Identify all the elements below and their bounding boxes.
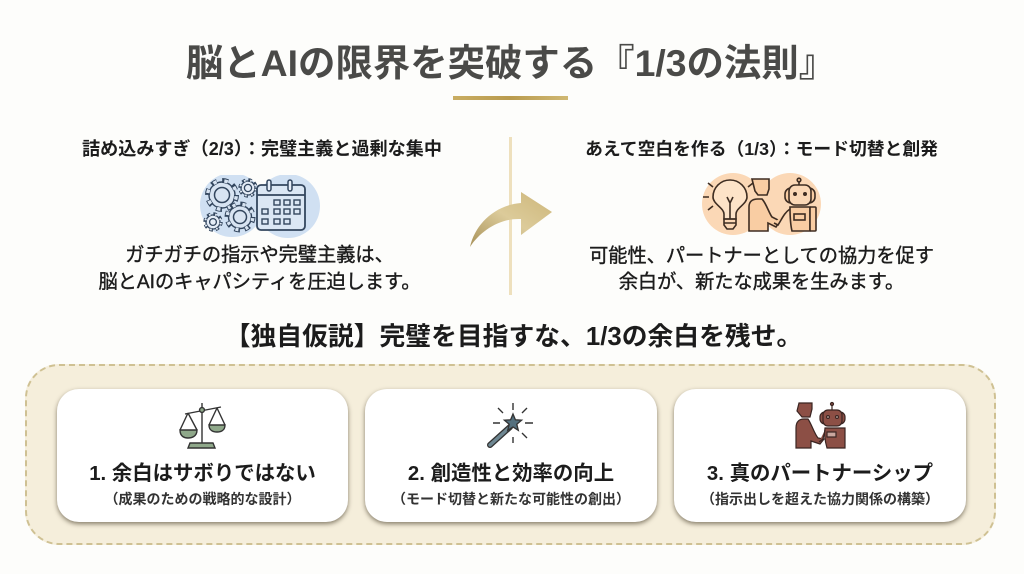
card 2 subtitle: （モード切替と新たな可能性の創出） [392, 491, 630, 507]
card 3 [674, 389, 966, 522]
left body text: ガチガチの指示や完璧主義は、 [125, 245, 394, 266]
title underline [453, 96, 568, 100]
panel: left, over-packed [82, 139, 442, 293]
card 3 subtitle: （指示出しを超えた協力関係の構築） [701, 491, 939, 507]
card 1 subtitle: （成果のための戦略的な設計） [104, 491, 300, 507]
right body text: 可能性、パートナーとしての協力を促す [589, 246, 934, 267]
divider line [509, 137, 512, 295]
panel: takeaways container [25, 364, 996, 545]
arrow [470, 192, 552, 247]
large gear [208, 180, 236, 210]
lower large gear [227, 204, 253, 230]
right body text: 余白が、新たな成果を生みます。 [619, 272, 904, 292]
card 3 title: 3. 真のパートナーシップ [707, 463, 933, 485]
left body text: 脳とAIのキャパシティを圧迫します。 [98, 272, 421, 293]
lower small gear [205, 214, 221, 230]
icon: magic wand [487, 403, 533, 448]
left heading: 詰め込みすぎ（2/3）：完璧主義と過剰な集中 [82, 139, 442, 159]
icon: light bulb, person and robot [702, 173, 821, 235]
card 1 [57, 389, 348, 522]
card 2 title: 2. 創造性と効率の向上 [408, 463, 614, 485]
left body text [98, 244, 421, 293]
top small gear [240, 180, 256, 196]
icon: person and robot handshake [795, 402, 846, 449]
card 2 [365, 389, 657, 522]
hypothesis heading: 【独自仮説】完璧を目指すな、1/3の余白を残せ。 [225, 323, 802, 351]
title: 脳とAIの限界を突破する『1/3の法則』 [186, 42, 836, 84]
card 1 title: 1. 余白はサボりではない [89, 463, 316, 485]
panel: right, intentional whitespace [585, 139, 938, 292]
icon: gears and calendar [200, 175, 320, 238]
right body text [589, 245, 934, 292]
icon: balance scale [179, 403, 226, 449]
right heading: あえて空白を作る（1/3）：モード切替と創発 [585, 139, 938, 159]
